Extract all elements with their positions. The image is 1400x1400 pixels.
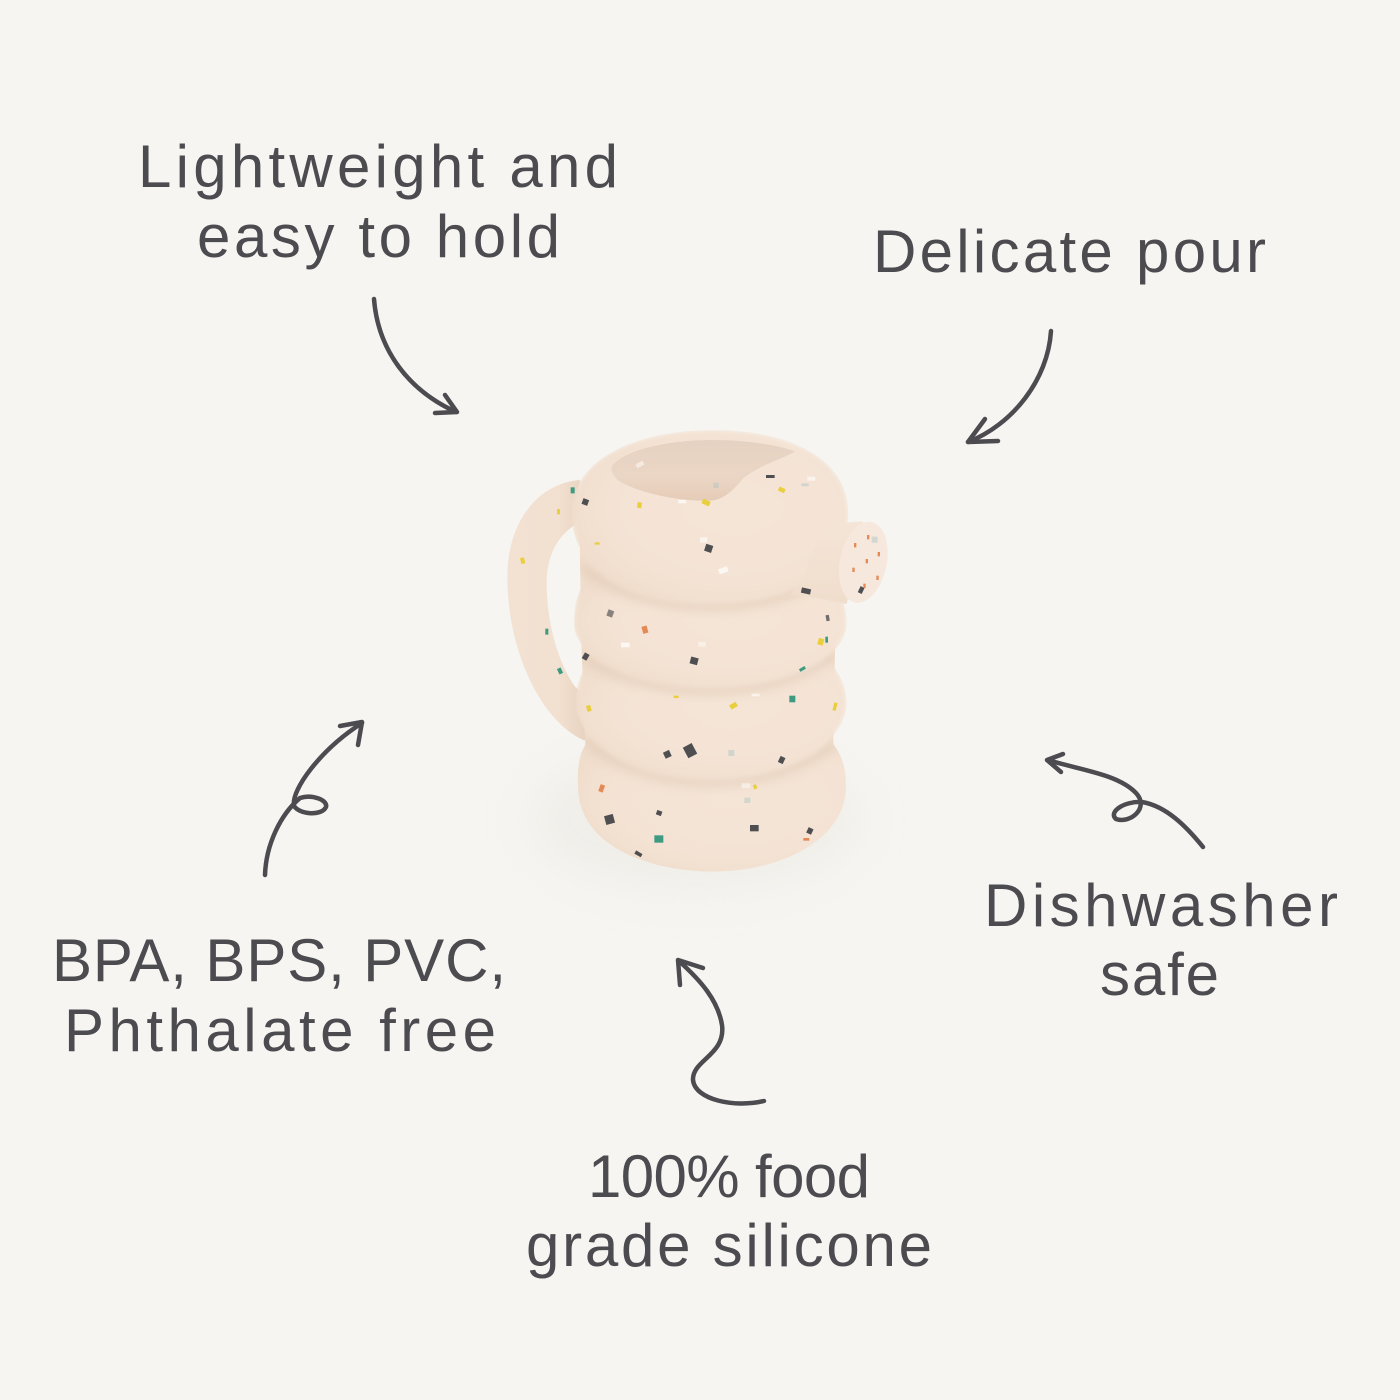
arrow: from Lightweight label to jug <box>374 299 457 413</box>
arrow: from Delicate pour label to jug <box>968 331 1051 442</box>
jug opening <box>611 440 795 501</box>
heading: BPA, BPS, PVC, Phthalate free <box>52 927 506 1064</box>
arrow: from Dishwasher label to jug <box>1047 754 1203 847</box>
heading: BPA, BPS, PVC, Phthalate free: BPA, BPS, PVC, <box>52 927 506 994</box>
jug spout <box>790 517 895 607</box>
heading: BPA, BPS, PVC, Phthalate free: Phthalate free <box>64 997 496 1064</box>
heading: Lightweight and easy to hold: Lightweight and <box>138 133 618 200</box>
heading: Dishwasher safe: safe <box>1100 941 1219 1008</box>
heading: Lightweight and easy to hold: easy to hold <box>197 203 560 270</box>
heading: 100% food grade silicone <box>526 1143 932 1279</box>
arrow: from food grade label to jug <box>678 960 764 1103</box>
product: speckled silicone watering jug <box>507 430 895 872</box>
heading: 100% food grade silicone: grade silicone <box>526 1212 932 1279</box>
heading: Lightweight and easy to hold <box>138 133 618 270</box>
infographic canvas <box>56 144 1337 1278</box>
speckles <box>520 461 880 857</box>
heading: Dishwasher safe: Dishwasher <box>984 872 1338 939</box>
heading: 100% food grade silicone: 100% food <box>588 1143 870 1210</box>
heading: Dishwasher safe <box>984 872 1338 1008</box>
jug shadow <box>530 750 860 890</box>
arrow: from BPA label to jug <box>265 722 362 875</box>
jug body rings <box>572 430 848 872</box>
heading: Delicate pour: Delicate pour <box>873 218 1266 285</box>
jug handle <box>507 480 592 740</box>
